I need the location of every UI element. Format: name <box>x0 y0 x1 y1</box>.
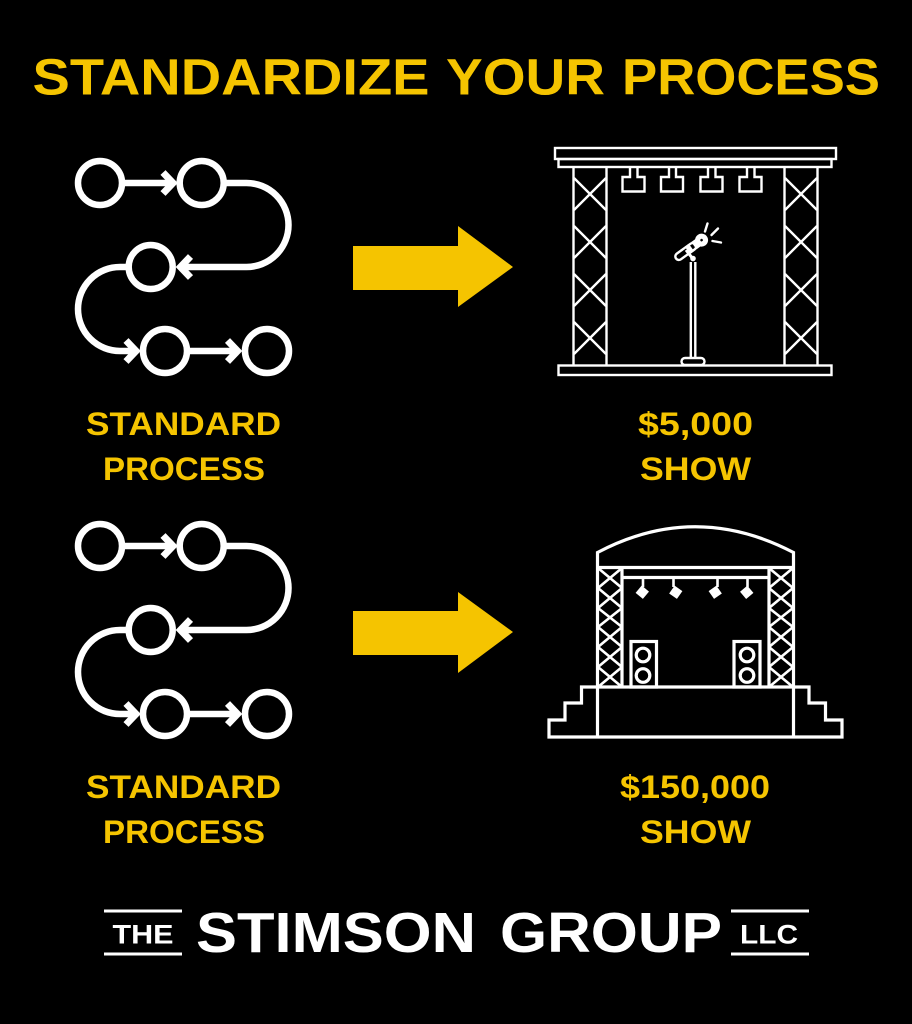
label: $5,000 show: SHOW <box>640 451 752 487</box>
icon: standard process flow <box>78 524 289 736</box>
label: $150,000 show <box>620 769 770 850</box>
icon: small stage with microphone <box>555 148 836 375</box>
icon: standard process flow <box>78 161 289 373</box>
panel: bottom row <box>78 524 842 850</box>
label: standard process: STANDARD <box>86 406 281 442</box>
title: PROCESS <box>622 48 880 106</box>
logo: The Stimson Group LLC: STIMSON <box>196 901 476 965</box>
label: standard process <box>86 769 281 850</box>
label: $5,000 show: $5,000 <box>638 406 753 442</box>
arrow: process to show <box>353 226 513 307</box>
logo: The Stimson Group LLC: LLC <box>740 920 798 950</box>
arrow: process to show <box>353 592 513 673</box>
panel: top row <box>78 148 836 487</box>
logo: The Stimson Group LLC: GROUP <box>500 901 722 965</box>
label: standard process <box>86 406 281 487</box>
label: standard process: STANDARD <box>86 769 281 805</box>
logo: The Stimson Group LLC: THE <box>112 920 174 950</box>
title <box>32 48 880 106</box>
label: $150,000 show: $150,000 <box>620 769 770 805</box>
label: $5,000 show <box>638 406 753 487</box>
logo: The Stimson Group LLC <box>104 901 809 965</box>
icon: large stage with speakers <box>549 527 842 737</box>
label: standard process: PROCESS <box>103 451 265 487</box>
label: $150,000 show: SHOW <box>640 814 752 850</box>
title: YOUR <box>446 48 605 106</box>
label: standard process: PROCESS <box>103 814 265 850</box>
title: STANDARDIZE <box>32 48 430 106</box>
